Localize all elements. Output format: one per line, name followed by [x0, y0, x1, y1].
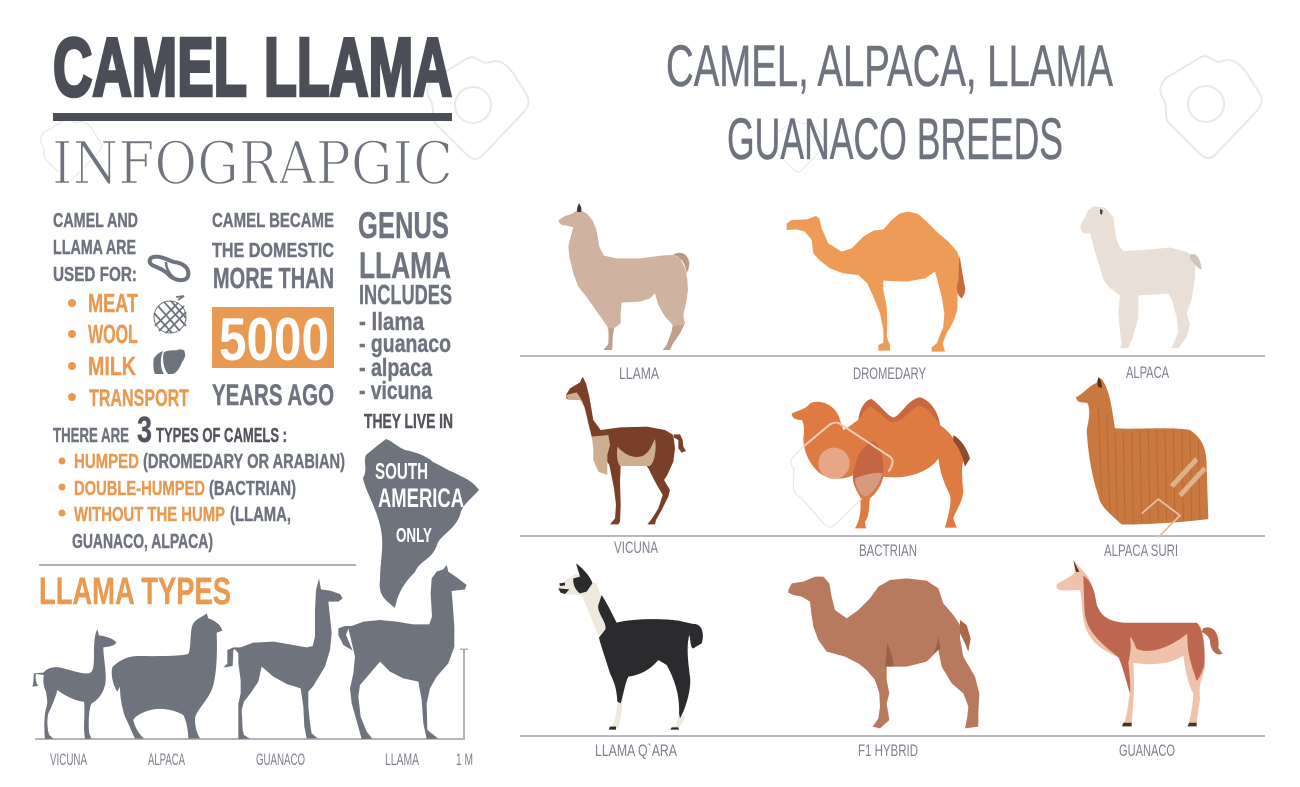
text block: genus llama includes: LLAMA	[359, 245, 451, 286]
text block: genus llama includes: - guanaco	[359, 330, 451, 358]
text block: three types of camels: GUANACO, ALPACA)	[72, 531, 213, 553]
text block: genus llama includes: - vicuna	[359, 377, 433, 405]
size comparison chart: llama types silhouettes: 1 M	[456, 750, 473, 769]
text block: genus llama includes: INCLUDES	[359, 279, 452, 310]
text block: domestic more than 5000 years ago: MORE THAN	[213, 263, 334, 295]
size comparison chart: llama types silhouettes: GUANACO	[256, 750, 305, 769]
text block: domestic more than 5000 years ago: CAMEL BECAME	[212, 210, 334, 232]
text block: three types of camels: WITHOUT THE HUMP	[74, 504, 225, 526]
breed: alpaca	[1080, 206, 1202, 348]
text block: uses of camel and llama: CAMEL AND	[53, 210, 138, 232]
text block: three types of camels: THERE ARE	[53, 425, 129, 447]
silhouette: guanaco	[223, 578, 343, 739]
label: llama: LLAMA	[619, 364, 659, 383]
label: llama q'ara: LLAMA Q`ARA	[595, 741, 677, 760]
size comparison chart: llama types silhouettes: ALPACA	[148, 750, 185, 769]
text block: three types of camels	[53, 409, 345, 553]
icon: milk jug	[153, 350, 185, 374]
text block: three types of camels: (DROMEDARY OR ARABIAN)	[143, 451, 345, 473]
breed: f1 hybrid	[788, 577, 979, 728]
main title: camel llama: CAMEL	[53, 20, 247, 114]
main title: camel llama	[53, 20, 452, 121]
map: south america: SOUTH	[375, 458, 428, 484]
breed: alpaca suri	[1076, 377, 1208, 537]
label: alpaca: ALPACA	[1126, 363, 1169, 382]
size comparison chart: llama types silhouettes: LLAMA	[385, 750, 419, 769]
text block: uses of camel and llama: USED FOR:	[53, 264, 137, 286]
label: guanaco: GUANACO	[1119, 741, 1175, 760]
subtitle: infograpgic: INFOGRAPGIC	[52, 128, 453, 198]
breed: guanaco	[1057, 560, 1223, 726]
breed: llama	[558, 203, 689, 350]
silhouette: llama	[338, 565, 467, 739]
size comparison chart: llama types silhouettes: VICUNA	[50, 750, 87, 769]
text block: domestic more than 5000 years ago: YEARS AGO	[212, 379, 334, 412]
heading: breeds title: GUANACO BREEDS	[727, 107, 1063, 172]
label: alpaca suri: ALPACA SURI	[1104, 541, 1178, 560]
heading: llama types: LLAMA TYPES	[39, 571, 231, 613]
label: f1 hybrid: F1 HYBRID	[858, 741, 918, 760]
text block: genus llama includes: - alpaca	[359, 354, 433, 382]
shelf lines	[520, 356, 1265, 736]
map: south america: AMERICA	[378, 483, 464, 513]
text block: domestic more than 5000 years ago	[212, 210, 334, 412]
size comparison chart: llama types silhouettes	[32, 565, 473, 769]
watermark marks	[41, 56, 1262, 180]
text block: three types of camels: (LLAMA,	[230, 504, 291, 526]
map: south america: ONLY	[396, 525, 432, 547]
text block: uses of camel and llama: WOOL	[88, 319, 138, 349]
text block: genus llama includes	[358, 205, 452, 405]
text block: three types of camels: 3	[137, 409, 152, 450]
main title: camel llama: LLAMA	[264, 20, 452, 114]
breed: llama q'ara	[558, 563, 703, 730]
text block: uses of camel and llama	[53, 210, 189, 412]
label: dromedary: DROMEDARY	[853, 364, 926, 383]
text block: uses of camel and llama: TRANSPORT	[89, 385, 189, 412]
text block: genus llama includes: GENUS	[358, 205, 449, 246]
text block: three types of camels: HUMPED	[74, 451, 139, 473]
silhouette: alpaca	[112, 613, 222, 739]
label: vicuna: VICUNA	[614, 538, 658, 557]
breed: vicuna	[566, 377, 686, 524]
text block: domestic more than 5000 years ago: THE DOMESTIC	[212, 240, 334, 262]
breed: bactrian	[791, 397, 970, 528]
heading: they live in: THEY LIVE IN	[364, 411, 453, 433]
silhouette: vicuna	[32, 629, 116, 739]
text block: genus llama includes: - llama	[359, 308, 425, 336]
text block: three types of camels: TYPES OF CAMELS :	[156, 425, 287, 447]
breed: dromedary	[787, 212, 965, 352]
text block: three types of camels: (BACTRIAN)	[209, 478, 296, 500]
map: south america	[363, 439, 479, 608]
text block: uses of camel and llama: LLAMA ARE	[53, 237, 136, 259]
text block: three types of camels: DOUBLE-HUMPED	[74, 478, 205, 500]
label: bactrian: BACTRIAN	[859, 541, 917, 560]
text block: domestic more than 5000 years ago: 5000	[219, 306, 329, 373]
icon: ball of wool	[154, 296, 186, 333]
heading: breeds title	[666, 34, 1113, 172]
text block: uses of camel and llama: MILK	[88, 351, 136, 381]
text block: uses of camel and llama: MEAT	[88, 288, 138, 318]
icon: sausage links	[150, 257, 188, 280]
